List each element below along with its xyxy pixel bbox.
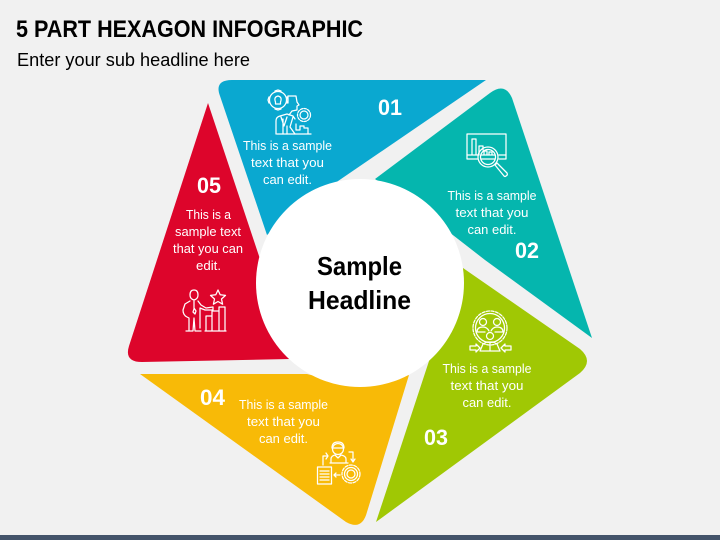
panel: part 05: [128, 103, 290, 362]
number 05: 05: [197, 173, 221, 198]
text block 04: text that you: [247, 414, 320, 429]
number 01: 01: [378, 95, 402, 120]
text block 03: can edit.: [462, 395, 512, 410]
center headline: Sample: [317, 251, 402, 281]
text block 05: that you can: [173, 241, 243, 256]
text block 01: This is a sample: [243, 138, 332, 153]
subtitle: Enter your sub headline here: [17, 49, 250, 70]
text block 02: can edit.: [468, 222, 516, 237]
icon: worker, document and gear cycle: [318, 442, 360, 484]
text block 01: text that you: [251, 155, 324, 170]
panel: part 01: [218, 80, 486, 235]
text block 05: [173, 207, 243, 273]
number 02: 02: [515, 238, 539, 263]
text block 05: sample text: [175, 224, 241, 239]
text block 05: edit.: [196, 258, 221, 273]
yellow segment: [140, 374, 409, 525]
blue segment: [218, 80, 486, 235]
title: 5 PART HEXAGON INFOGRAPHIC: [16, 16, 363, 43]
icon: team in gear with arrows: [470, 311, 511, 352]
panel: part 04: [140, 374, 409, 525]
icon: chart under magnifier: [467, 134, 507, 176]
center circle: [256, 179, 464, 387]
text block 02: This is a sample: [448, 188, 536, 203]
bottom bar: [0, 535, 720, 540]
text block 03: [442, 361, 532, 410]
text block 02: text that you: [456, 205, 528, 220]
center headline: [308, 251, 411, 315]
icon: thinking businessman with gear: [268, 90, 311, 134]
text block 03: text that you: [450, 378, 524, 393]
text block 04: [239, 397, 328, 446]
teal segment: [375, 89, 592, 338]
red segment: [128, 103, 290, 362]
center headline: Headline: [308, 285, 411, 315]
panel: part 03: [376, 268, 587, 522]
text block 05: This is a: [186, 207, 232, 222]
text block 02: [448, 188, 536, 237]
text block 01: can edit.: [263, 172, 312, 187]
text block 04: can edit.: [259, 431, 308, 446]
panel: part 02: [375, 89, 592, 338]
number 04: 04: [200, 385, 226, 410]
text block 04: This is a sample: [239, 397, 328, 412]
icon: businessman with star and bars: [183, 290, 226, 331]
text block 01: [243, 138, 332, 187]
text block 03: This is a sample: [442, 361, 532, 376]
number 03: 03: [424, 425, 448, 450]
green segment: [376, 268, 587, 522]
